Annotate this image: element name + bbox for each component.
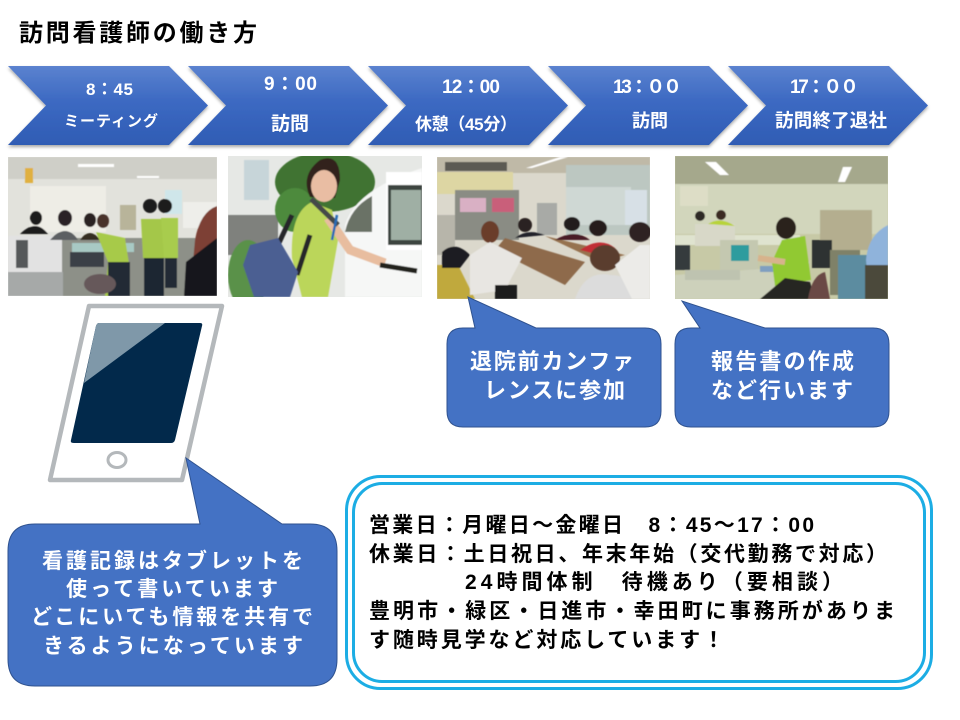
chevron: 9:00 visit: 9：00 [264,74,317,95]
info text lines: 24時間体制 待機あり（要相談） [465,571,843,594]
info text lines: 営業日：月曜日～金曜日 8：45～17：00 [369,514,814,537]
chevron: 8:45 meeting: 8：45 [86,80,133,99]
icon: tablet illustration [50,306,222,480]
callout: report writing: 報告書の作成 [711,349,854,374]
info text lines: 休業日：土日祝日、年末年始（交代勤務で対応） [369,543,887,566]
callout: report writing: など行います [711,378,853,403]
callout: discharge conference: 退院前カンファ [470,349,634,374]
callout: tablet records: 使って書いています [66,578,278,601]
callout: discharge conference: レンスに参加 [484,378,625,403]
chevron: 17:00 finish: 訪問終了退社 [775,110,887,131]
callout: tablet records: 看護記録はタブレットを [42,549,303,573]
chevron: 8:45 meeting [8,66,208,145]
callout: tablet records: きるようになっています [43,635,303,658]
info text lines [369,514,895,652]
callout: tablet records [8,458,337,686]
callout: tablet records: どこにいても情報を共有で [31,606,313,629]
chevron: 12:00 break: 12：00 [442,77,500,98]
chevron: 12:00 break [368,66,568,145]
chevron: 8:45 meeting: ミーティング [64,112,158,130]
chevron: 9:00 visit [188,66,388,145]
info text lines: 豊明市・緑区・日進市・幸田町に事務所がありま [369,599,895,623]
photo: writing reports at desk [675,156,888,299]
callout: report writing [675,301,889,427]
chevron: 13:00 visit: 13：００ [613,77,682,98]
photo: staff meeting in office [8,157,217,296]
info panel: business hours [346,476,932,688]
info text lines: す随時見学など対応しています！ [369,629,724,652]
photo: discharge conference room [437,157,651,299]
chevron: 13:00 visit: 訪問 [632,111,668,131]
chevron: 13:00 visit [548,66,748,145]
callout: discharge conference [447,297,661,427]
chevron: 17:00 finish: 17：００ [790,77,859,98]
timeline chevrons [8,66,928,145]
photo: smiling nurse beside car [228,156,422,297]
chevron: 12:00 break: 休憩（45分） [415,114,517,134]
chevron: 17:00 finish [728,66,928,145]
chevron: 9:00 visit: 訪問 [271,113,309,135]
title: 訪問看護師の働き方 [19,20,257,47]
